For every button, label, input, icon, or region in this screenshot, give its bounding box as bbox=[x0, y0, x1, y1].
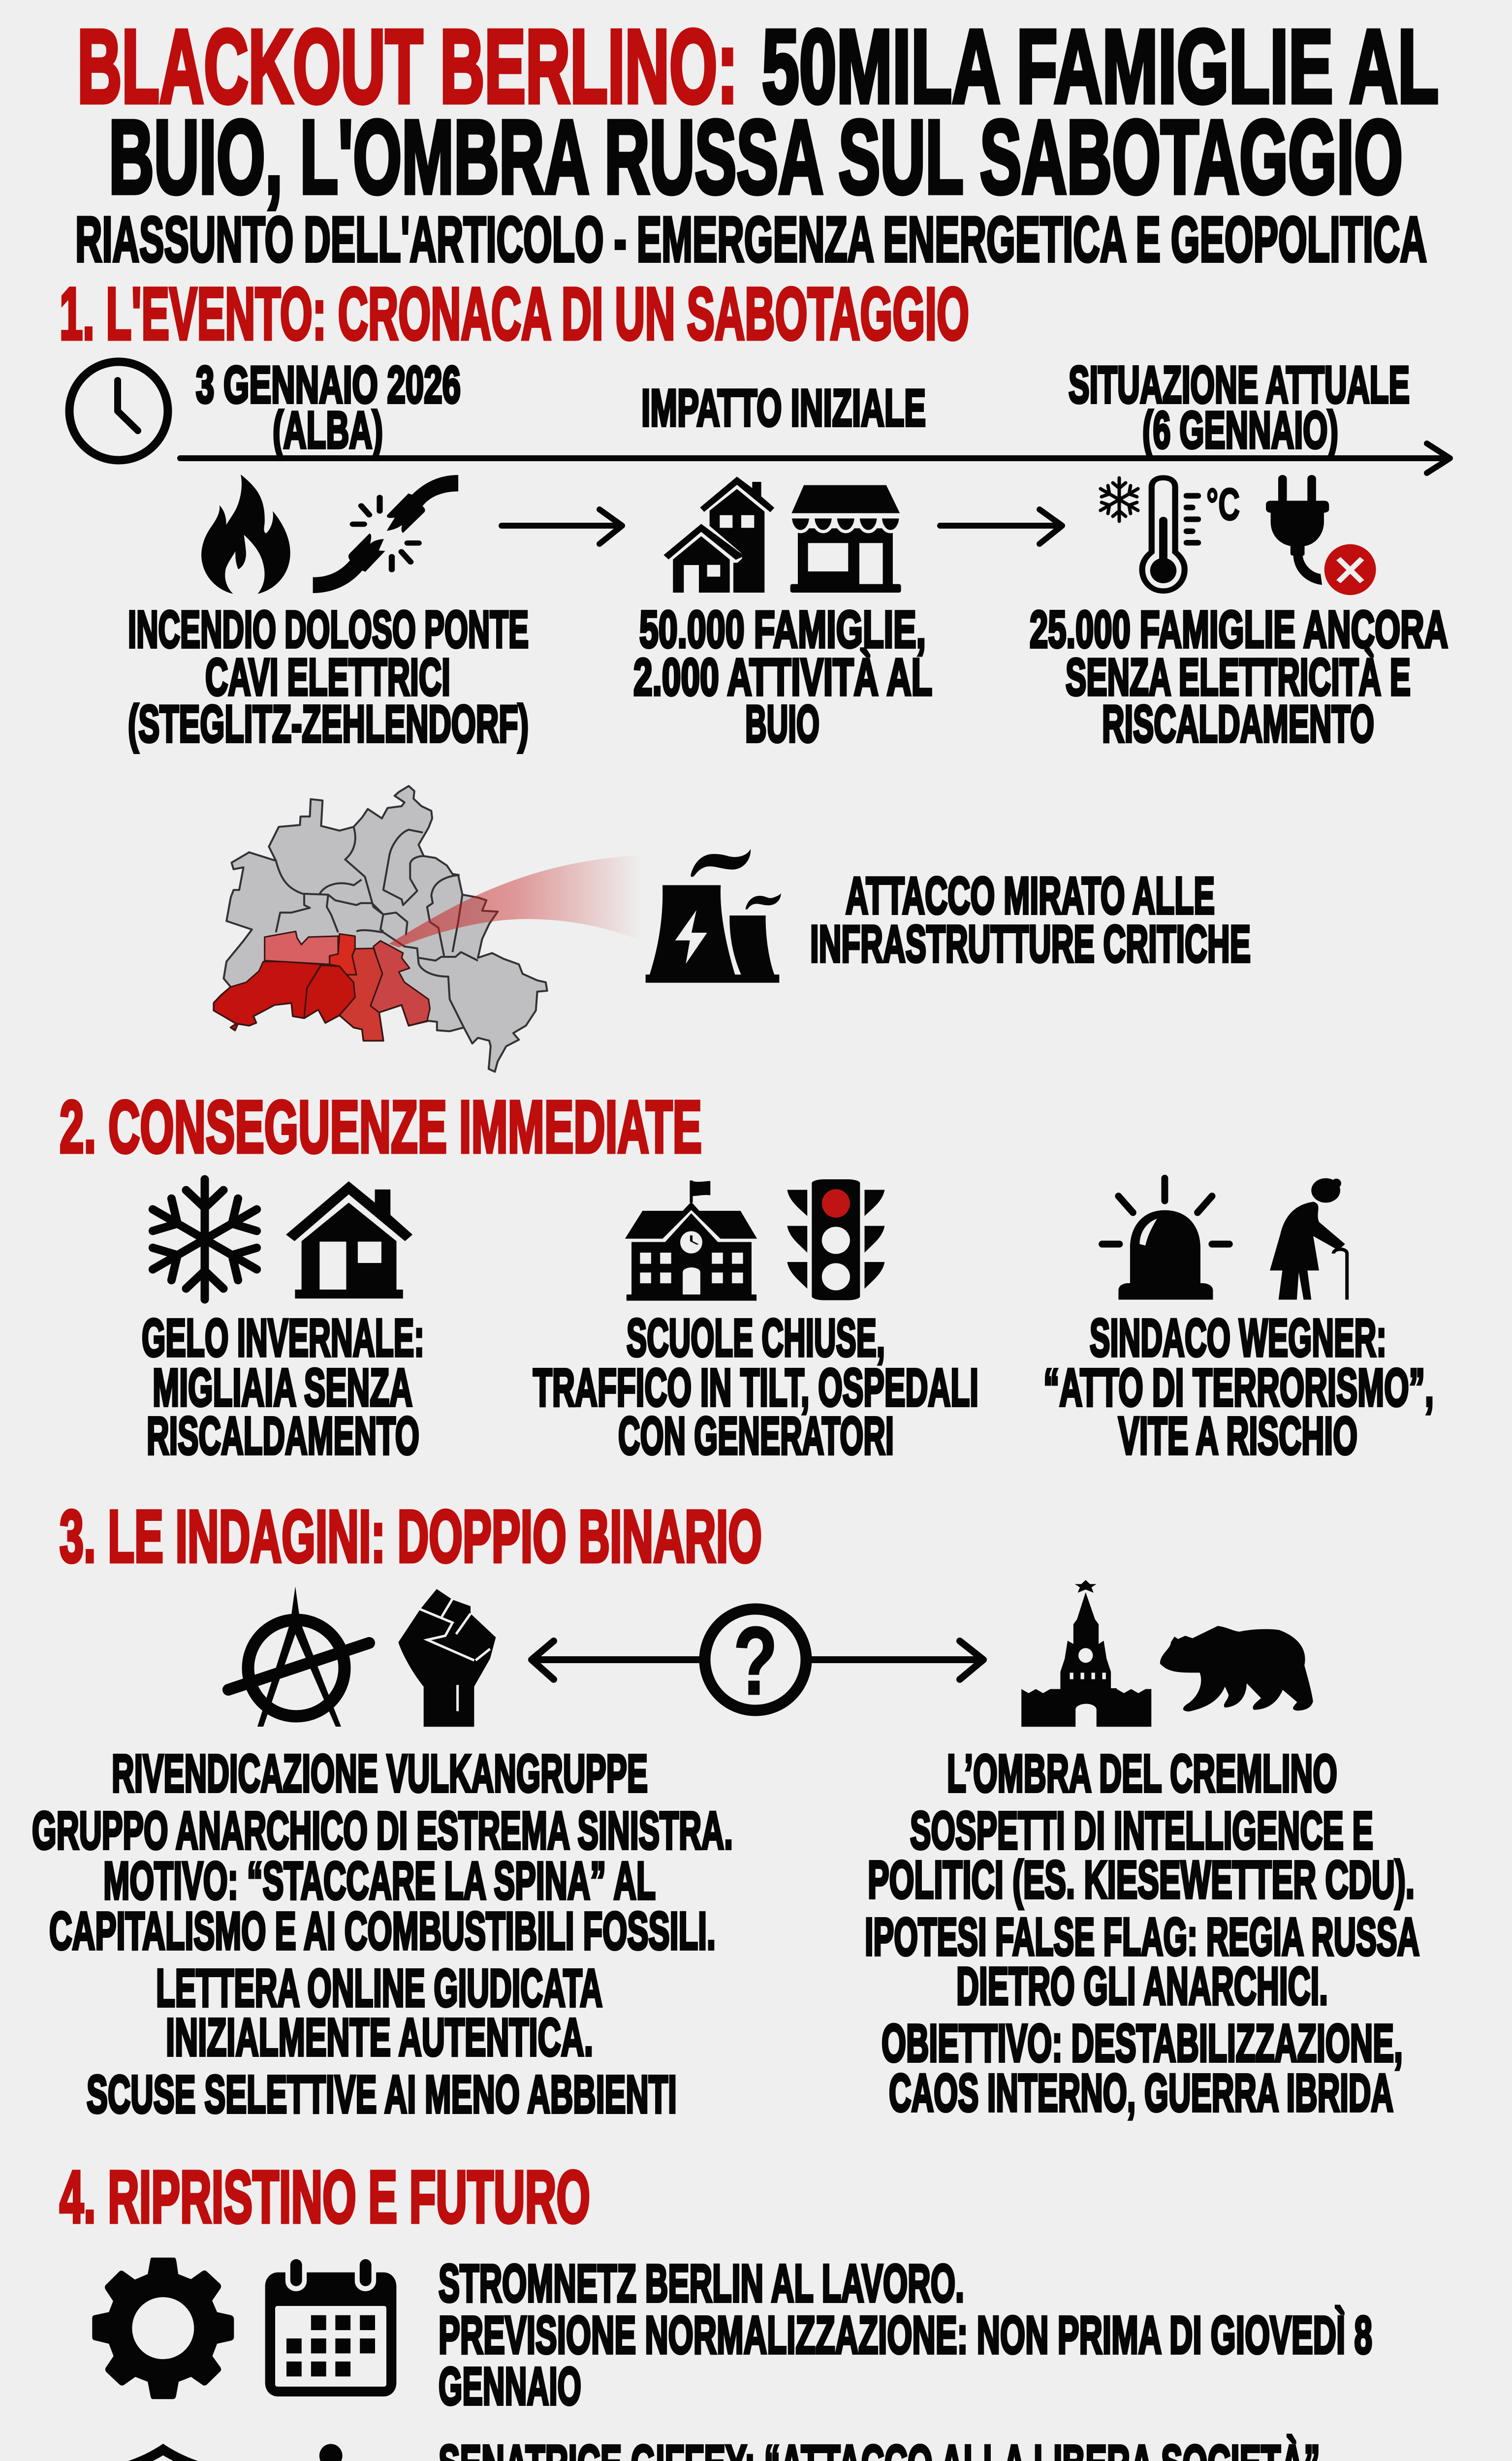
text: stromnetz: GENNAIO bbox=[439, 2356, 581, 2416]
icon: shop bbox=[790, 485, 901, 593]
icon: raised fist bbox=[398, 1589, 496, 1727]
icon: plug with red cross bbox=[1266, 475, 1376, 595]
icon: thermometer bbox=[1142, 478, 1240, 591]
column text: vulkangruppe: RIVENDICAZIONE VULKANGRUPPE bbox=[112, 1743, 648, 1803]
icon: small snowflake bbox=[1097, 478, 1141, 521]
column text: vulkangruppe: SCUSE SELETTIVE AI MENO ABBIENTI bbox=[87, 2064, 677, 2124]
icon: siren bbox=[1102, 1178, 1229, 1300]
column text: vulkangruppe bbox=[32, 1743, 733, 2124]
section 3: indagini bbox=[32, 1495, 1419, 2124]
title bbox=[77, 8, 1439, 215]
icon: school bbox=[625, 1180, 757, 1301]
icon: broken cable bbox=[313, 475, 458, 593]
timeline labels: (6 GENNAIO) bbox=[1142, 401, 1338, 459]
icon: power plant bbox=[646, 849, 781, 983]
icon: house bbox=[286, 1181, 412, 1298]
section 1: evento bbox=[60, 272, 1450, 1072]
column text: schools: TRAFFICO IN TILT, OSPEDALI bbox=[533, 1357, 978, 1417]
highlighted district bbox=[214, 931, 430, 1041]
icon: network bbox=[259, 2444, 403, 2461]
column text: schools: SCUOLE CHIUSE, bbox=[627, 1308, 885, 1367]
icon: bear bbox=[1160, 1626, 1313, 1711]
icon: shield bbox=[101, 2444, 224, 2461]
timeline labels: 3 GENNAIO 2026 bbox=[196, 356, 461, 414]
column text: cold: MIGLIAIA SENZA bbox=[153, 1357, 412, 1417]
icon: snowflake bbox=[143, 1179, 266, 1299]
title: BLACKOUT BERLINO: bbox=[77, 8, 738, 125]
column text: fire: (STEGLITZ-ZEHLENDORF) bbox=[128, 695, 529, 753]
heading 2: 2. CONSEGUENZE IMMEDIATE bbox=[60, 1085, 702, 1168]
column text: impact bbox=[633, 600, 932, 753]
timeline labels: (ALBA) bbox=[273, 401, 383, 459]
heading 4: 4. RIPRISTINO E FUTURO bbox=[60, 2155, 590, 2238]
arrow: double arrow with question mark bbox=[532, 1607, 983, 1715]
text: stromnetz bbox=[439, 2253, 1372, 2416]
icon: elderly person bbox=[1270, 1178, 1347, 1300]
column text: impact: BUIO bbox=[745, 695, 819, 753]
column text: cold: GELO INVERNALE: bbox=[142, 1308, 424, 1367]
icon: clock bbox=[69, 362, 168, 460]
arrow: to current bbox=[940, 509, 1062, 544]
map caption bbox=[810, 867, 1251, 973]
column text: vulkangruppe: MOTIVO: “STACCARE LA SPINA” AL bbox=[103, 1851, 656, 1910]
timeline labels bbox=[196, 356, 1410, 459]
icon: thermometer: °C bbox=[1206, 479, 1240, 530]
column text: mayor: VITE A RISCHIO bbox=[1118, 1406, 1357, 1465]
column text: vulkangruppe: GRUPPO ANARCHICO DI ESTREMA SINISTRA. bbox=[32, 1800, 733, 1860]
arrow: to impact bbox=[502, 509, 622, 544]
column text: fire: INCENDIO DOLOSO PONTE bbox=[128, 600, 529, 659]
arrow: timeline bbox=[180, 443, 1450, 473]
beam from map to plant bbox=[389, 855, 650, 947]
column text: impact: 2.000 ATTIVITÀ AL bbox=[633, 648, 932, 706]
icon: kremlin tower bbox=[1021, 1580, 1151, 1727]
column text: impact: 50.000 FAMIGLIE, bbox=[639, 600, 926, 659]
icon: calendar bbox=[265, 2259, 396, 2397]
column text: cold bbox=[142, 1308, 424, 1465]
heading 3: 3. LE INDAGINI: DOPPIO BINARIO bbox=[60, 1495, 762, 1578]
column text: cold: RISCALDAMENTO bbox=[147, 1406, 419, 1465]
icon: traffic light bbox=[787, 1179, 884, 1300]
section 4: ripristino bbox=[60, 2155, 1372, 2461]
column text: kremlin bbox=[865, 1743, 1419, 2122]
column text: vulkangruppe: LETTERA ONLINE GIUDICATA bbox=[156, 1958, 602, 2018]
timeline labels: IMPATTO INIZIALE bbox=[641, 379, 926, 437]
column text: fire: CAVI ELETTRICI bbox=[205, 648, 450, 706]
column text: current bbox=[1030, 600, 1448, 753]
column text: vulkangruppe: INIZIALMENTE AUTENTICA. bbox=[166, 2007, 593, 2067]
arrow: double arrow with question mark: ? bbox=[733, 1607, 778, 1715]
map caption: ATTACCO MIRATO ALLE bbox=[846, 867, 1215, 925]
icon: flame bbox=[201, 474, 290, 594]
section 2: conseguenze bbox=[60, 1085, 1434, 1465]
column text: vulkangruppe: CAPITALISMO E AI COMBUSTIBILI FOSSILI. bbox=[49, 1901, 716, 1960]
text: stromnetz: STROMNETZ BERLIN AL LAVORO. bbox=[439, 2253, 964, 2313]
map of Berlin with highlighted south-west districts bbox=[214, 786, 650, 1072]
column text: mayor bbox=[1043, 1308, 1434, 1465]
icon: houses bbox=[663, 476, 774, 593]
column text: fire bbox=[128, 600, 529, 753]
icon: anarchy symbol bbox=[228, 1586, 369, 1727]
icon: gear bbox=[92, 2258, 234, 2399]
column text: schools bbox=[533, 1308, 978, 1465]
column text: schools: CON GENERATORI bbox=[618, 1406, 894, 1465]
